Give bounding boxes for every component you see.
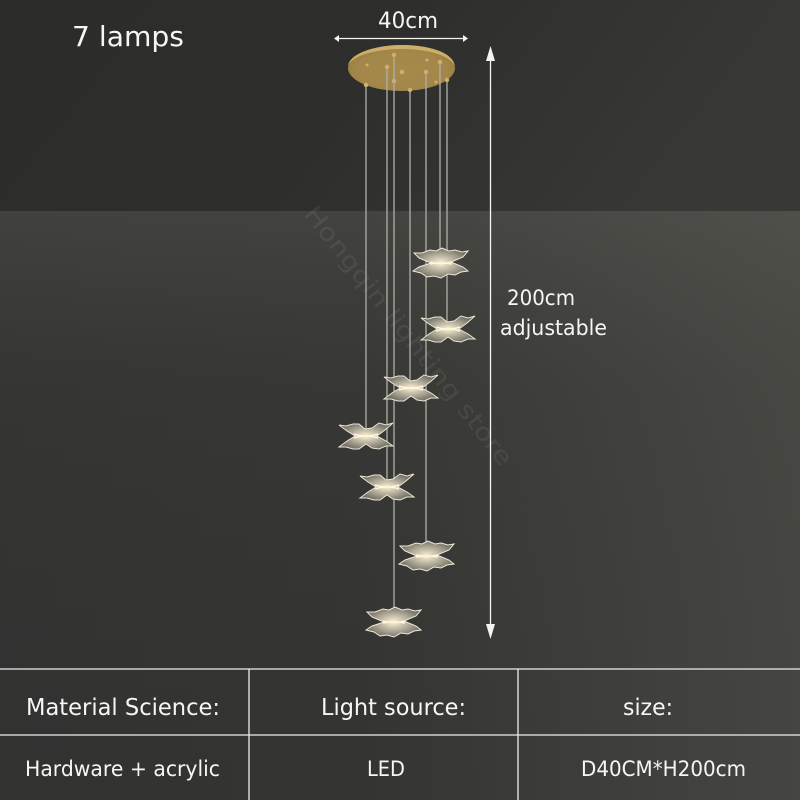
specification table xyxy=(0,669,800,800)
lamp 2 xyxy=(421,316,475,342)
height label: 200cm adjustable: adjustable xyxy=(500,316,607,340)
width dimension: 40cm xyxy=(334,9,468,42)
width dimension: 40cm: 40cm xyxy=(378,9,438,34)
value: Hardware + acrylic: Hardware + acrylic xyxy=(25,757,220,781)
title: 7 lamps: 7 lamps xyxy=(72,20,184,53)
header: Light source: Light source: xyxy=(321,695,466,721)
canopy: round gold ceiling plate xyxy=(348,45,455,92)
lamp 6 xyxy=(399,541,454,571)
value: LED: LED xyxy=(367,757,405,781)
height label: 200cm adjustable: 200cm xyxy=(507,286,575,310)
lamp 3 xyxy=(384,375,438,401)
height dimension arrow xyxy=(486,46,495,639)
header: Material Science: Material Science: xyxy=(26,695,220,721)
header: size: size: xyxy=(623,695,673,721)
lamp 5 xyxy=(360,474,414,500)
lamp 4 xyxy=(339,423,393,449)
watermark: Hongqin lighting store xyxy=(298,200,519,471)
lamp 7 xyxy=(366,607,421,637)
lamp 1 xyxy=(413,248,468,278)
value: D40CM*H200cm: D40CM*H200cm xyxy=(581,757,746,781)
suspension wires xyxy=(366,57,447,612)
height label: 200cm adjustable xyxy=(500,286,607,340)
